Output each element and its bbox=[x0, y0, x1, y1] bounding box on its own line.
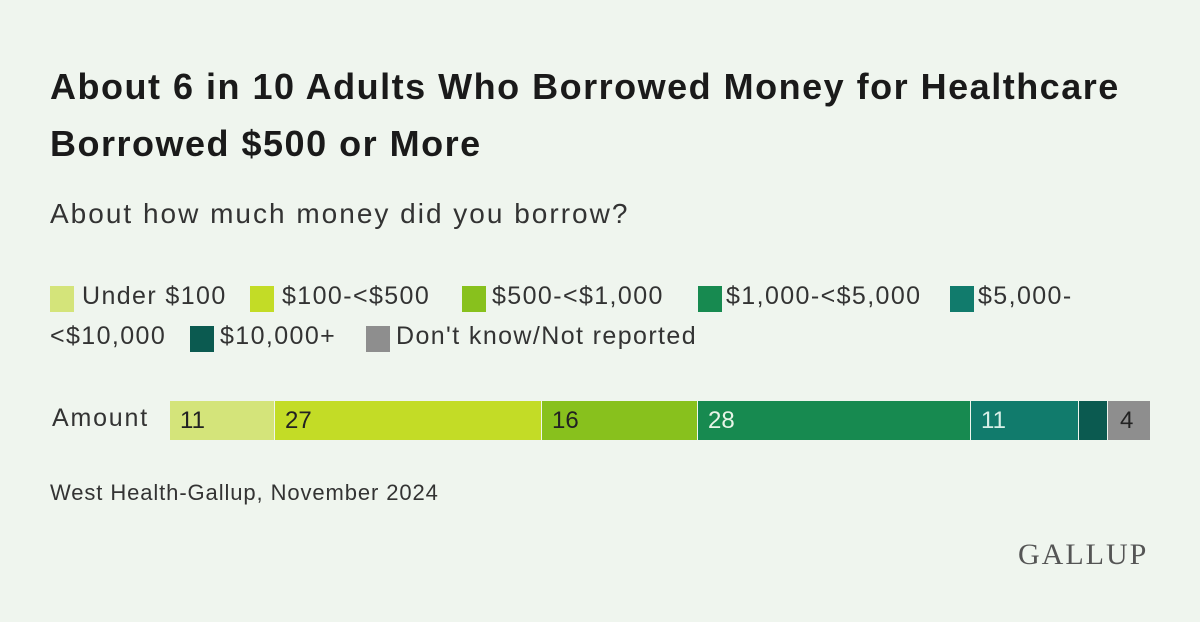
title bbox=[50, 66, 1120, 164]
source: West Health-Gallup, November 2024 bbox=[50, 480, 439, 505]
legend: Don't know/Not reported bbox=[396, 322, 697, 350]
legend: $5,000- bbox=[978, 282, 1073, 310]
legend bbox=[50, 282, 1073, 352]
row label: Amount bbox=[52, 404, 149, 432]
stacked bar: 16 bbox=[552, 407, 579, 434]
legend: $100-<$500 bbox=[282, 282, 430, 310]
legend: $10,000+ bbox=[220, 322, 336, 350]
logo: GALLUP bbox=[1018, 538, 1148, 571]
stacked bar: 11 bbox=[981, 407, 1006, 434]
stacked bar bbox=[170, 401, 1150, 440]
stacked bar: 28 bbox=[708, 407, 735, 434]
stacked bar: 4 bbox=[1120, 407, 1133, 434]
legend: $1,000-<$5,000 bbox=[726, 282, 921, 310]
title: About 6 in 10 Adults Who Borrowed Money for Healthcare bbox=[50, 66, 1120, 107]
legend: <$10,000 bbox=[50, 322, 166, 350]
title: Borrowed $500 or More bbox=[50, 123, 482, 164]
stacked bar: 11 bbox=[180, 407, 205, 434]
legend: $500-<$1,000 bbox=[492, 282, 664, 310]
stacked bar: 27 bbox=[285, 407, 312, 434]
legend: Under $100 bbox=[82, 282, 227, 310]
subtitle: About how much money did you borrow? bbox=[50, 198, 629, 229]
